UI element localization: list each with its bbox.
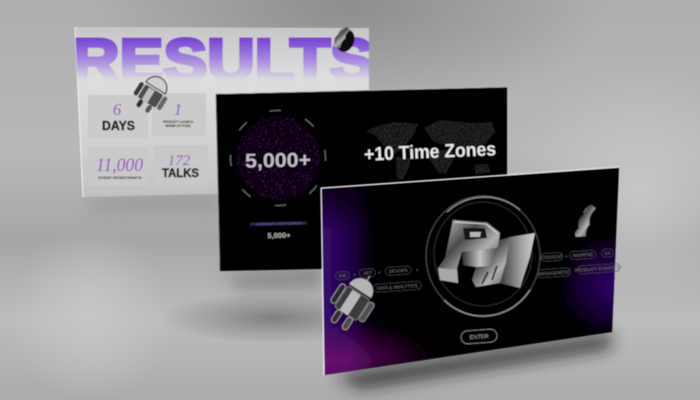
panel: community slide (216, 87, 507, 271)
tag row: technologies upper: .NET (362, 270, 373, 276)
tag row: technologies lower: DATA & ANALYTICS (377, 283, 418, 291)
tag row: technologies lower: PRODUCT STRATEGY (575, 265, 622, 273)
tag row: technologies upper: CONTENT (541, 254, 563, 260)
label: community caption: COMMUNITY PARTICIPANTS (256, 221, 303, 227)
icon: small android (128, 70, 175, 118)
stat card: 1 product launch (152, 93, 206, 136)
panel: hero slide (320, 166, 622, 376)
heading: RESULTS: RESULTS (72, 27, 374, 94)
shadows under screens (84, 191, 612, 388)
stat card: 1 product launch: WARM UP PODS (165, 124, 191, 128)
stat: 5,000+ large: 5,000+ (245, 149, 311, 173)
tag row: technologies lower: MANAGEMENT (537, 269, 570, 277)
stat card: 6 days (88, 95, 148, 138)
stat card: 1 product launch: PRODUCT LAUNCH (163, 120, 194, 124)
stat card: 11,000 registrants (89, 147, 148, 186)
faded background word: NUMBERS (373, 342, 532, 383)
heading: +10 Time Zones: +10 Time Zones (364, 139, 496, 166)
stat card: 11,000 registrants: 11,000 (96, 155, 143, 176)
stat card: 172 talks: TALKS (162, 166, 199, 180)
icon: chrome android (321, 265, 387, 336)
stat card: 172 talks: 172 (168, 153, 191, 169)
tag row: technologies upper: ANDROID (572, 252, 594, 258)
tag row: technologies upper: + (353, 272, 356, 277)
icon: chrome cloud (575, 203, 612, 241)
tag row: technologies upper (335, 249, 614, 280)
stat: 5,000+ small: 5,000+ (267, 231, 291, 240)
button: ENTER (461, 329, 497, 344)
icon: small cloud (331, 25, 358, 55)
stat card: 6 days: 6 (113, 100, 122, 119)
tag row: technologies upper: + (565, 254, 568, 259)
stat card: 172 talks (154, 145, 208, 185)
stat card: 1 product launch: 1 (174, 100, 182, 119)
tag row: technologies upper: iOS (339, 273, 346, 279)
tag row: technologies upper: + (378, 270, 381, 275)
button: ENTER: ENTER (469, 334, 489, 341)
tag row: technologies upper: + (416, 267, 419, 273)
tag row: technologies lower (373, 263, 623, 292)
logo: chrome PN emblem (426, 196, 540, 316)
panel: results slide (72, 25, 374, 197)
stat card: 11,000 registrants: EVENT REGISTRANTS (98, 175, 142, 180)
tag row: technologies upper: UX (604, 250, 611, 256)
stat card: 6 days: DAYS (102, 119, 135, 133)
tag row: technologies upper: DEVOPS (389, 268, 408, 274)
chart: world map (362, 118, 498, 182)
chart: particle globe (229, 109, 327, 207)
